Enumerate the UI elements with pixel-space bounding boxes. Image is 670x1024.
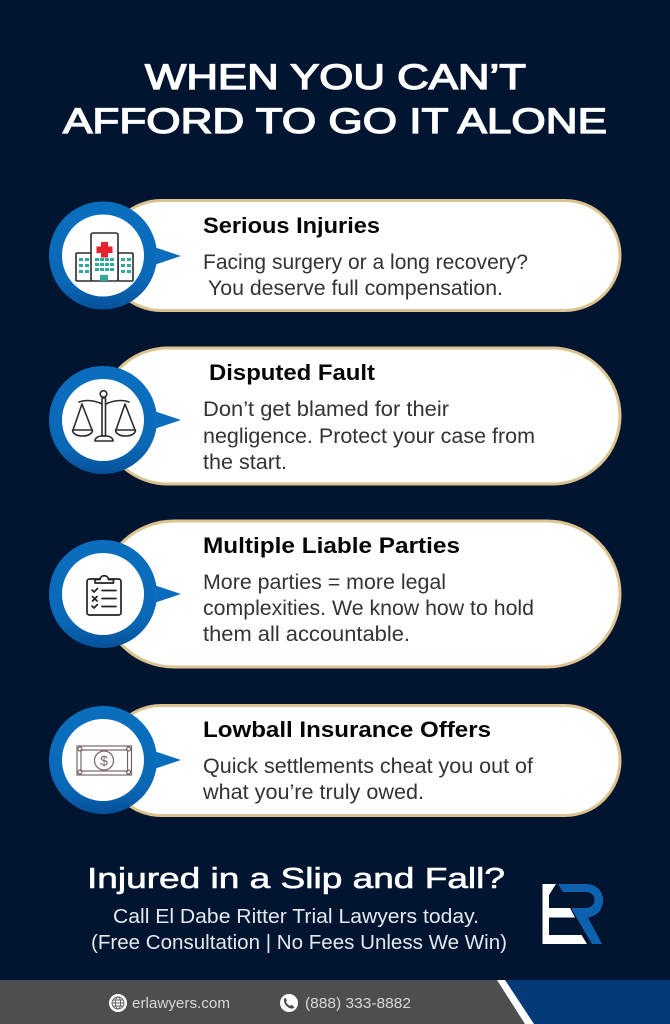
call to action	[87, 863, 507, 954]
footer bar	[0, 980, 670, 1024]
icon: phone	[280, 994, 298, 1012]
title	[63, 57, 607, 141]
icon: hospital	[76, 233, 133, 281]
heading: Lowball Insurance Offers	[203, 717, 491, 742]
body text: complexities. We know how to hold	[203, 596, 534, 620]
badge ring	[49, 540, 181, 648]
card background	[101, 521, 620, 667]
body text: them all accountable.	[203, 622, 410, 646]
icon: dollar bill: $	[100, 752, 108, 768]
icon: scales of justice	[72, 391, 136, 441]
body text	[202, 754, 533, 804]
call to action text	[91, 906, 507, 954]
body text: Don’t get blamed for their	[203, 397, 449, 421]
body text	[203, 397, 535, 474]
card background	[100, 348, 620, 484]
card background	[106, 706, 620, 816]
website: erlawyers.com	[132, 996, 230, 1012]
icon: globe	[109, 994, 127, 1012]
card background	[106, 200, 620, 310]
body text: the start.	[203, 450, 287, 474]
panel: lowball insurance offers	[49, 706, 620, 816]
panel: multiple liable parties	[49, 521, 620, 667]
body text	[203, 570, 534, 646]
body text: Facing surgery or a long recovery?	[203, 250, 528, 274]
body text	[203, 250, 528, 300]
heading: Serious Injuries	[203, 213, 380, 238]
heading: Multiple Liable Parties	[203, 533, 460, 558]
call to action text: Call El Dabe Ritter Trial Lawyers today.	[113, 906, 479, 928]
body text: negligence. Protect your case from	[203, 424, 535, 448]
body text: You deserve full compensation.	[208, 276, 503, 300]
body text: what you’re truly owed.	[202, 780, 424, 804]
body text: More parties = more legal	[203, 570, 446, 594]
heading: Disputed Fault	[209, 360, 375, 385]
badge ring	[49, 366, 181, 474]
panel: serious injuries	[49, 200, 620, 310]
title: WHEN YOU CAN’T	[145, 57, 526, 97]
title: AFFORD TO GO IT ALONE	[63, 101, 607, 141]
body text: Quick settlements cheat you out of	[203, 754, 533, 778]
phone number: (888) 333-8882	[305, 996, 411, 1012]
icon: checklist clipboard	[87, 576, 121, 615]
call to action text: (Free Consultation | No Fees Unless We Win)	[91, 932, 507, 954]
panel: disputed fault	[49, 348, 620, 484]
call to action heading: Injured in a Slip and Fall?	[87, 863, 505, 895]
badge ring	[49, 706, 181, 814]
logo: ER	[542, 884, 603, 944]
icon: dollar bill	[77, 746, 132, 775]
badge ring	[49, 202, 181, 310]
